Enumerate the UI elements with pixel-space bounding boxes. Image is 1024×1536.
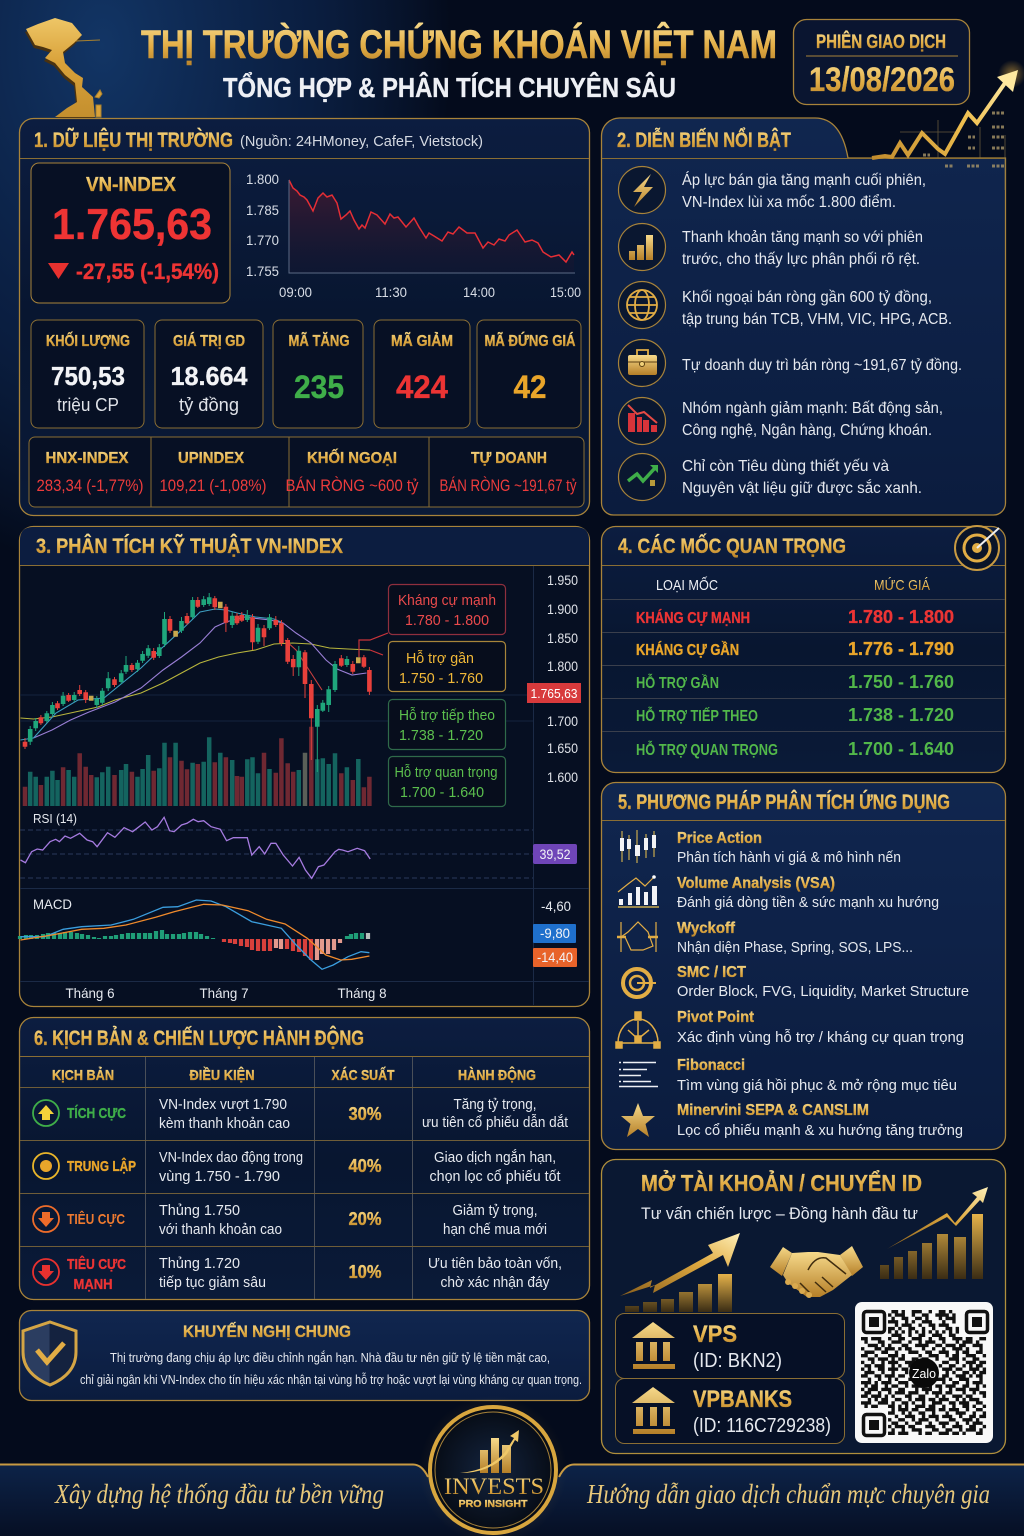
icon: volume [618, 875, 659, 907]
row: neutral: Giao dịch ngắn hạn, [434, 1149, 556, 1166]
index strip: UPINDEX [178, 450, 244, 467]
row: strong resistance: KHÁNG CỰ MẠNH [636, 608, 750, 627]
table head [52, 1066, 536, 1084]
price axis: 1.650 [547, 741, 578, 756]
row: near support: HỖ TRỢ GẦN [636, 673, 719, 692]
stat: declining: MÃ GIẢM [391, 330, 453, 350]
intraday line chart [246, 172, 581, 300]
MACD value tag: blue [533, 924, 576, 943]
method: SMC: SMC / ICT [677, 964, 746, 981]
recommendation text: Thị trường đang chịu áp lực điều chỉnh ngắn hạn. Nhà đầu tư nên giữ tỷ lệ tiền mặt cao, [110, 1350, 550, 1365]
heading: MỞ TÀI KHOẢN / CHUYỂN ID [641, 1168, 922, 1196]
text: green sectors: Nguyên vật liệu giữ được sắc xanh. [682, 478, 922, 497]
recommendation text: chỉ giải ngân khi VN-Index cho tín hiệu xác nhận tại vùng hỗ trợ hoặc vượt lại vùng kháng cự quan trọng. [80, 1372, 582, 1387]
stat: advancing: 235 [294, 369, 344, 405]
icon: briefcase [618, 340, 666, 386]
text: falling sectors: Công nghệ, Ngân hàng, Chứng khoán. [682, 422, 932, 439]
price axis [547, 573, 578, 785]
row: positive: TÍCH CỰC [67, 1105, 126, 1122]
text: selling pressure [682, 170, 926, 211]
method: Wyckoff: Nhận diện Phase, Spring, SOS, LPS... [677, 940, 913, 956]
table head: ĐIỀU KIỆN [190, 1066, 254, 1084]
panel 1: market data [20, 118, 590, 516]
panel 4: key levels [602, 526, 1006, 772]
stat: volume: 750,53 [51, 361, 125, 391]
date badge [794, 20, 970, 104]
time axis: Tháng 6 [66, 985, 115, 1001]
row: near resistance: KHÁNG CỰ GẦN [636, 640, 739, 659]
method: Wyckoff [677, 920, 913, 956]
row: key support: 1.700 - 1.640 [848, 739, 954, 759]
row: key support: HỖ TRỢ QUAN TRỌNG [636, 740, 778, 759]
panel 6: scenarios [20, 1018, 590, 1300]
stat: volume: triệu CP [57, 395, 119, 415]
stat: advancing: MÃ TĂNG [288, 330, 350, 350]
volume bars [25, 727, 369, 806]
row: next support: HỖ TRỢ TIẾP THEO [636, 706, 758, 725]
logo wordmark: INVESTS [444, 1474, 544, 1499]
intraday line chart: 09:00 [279, 284, 312, 300]
row: positive [33, 1096, 569, 1132]
broker card: VPBanks [616, 1378, 844, 1444]
method: VSA [677, 875, 939, 911]
method: SMC [677, 964, 969, 1000]
candle bodies [30, 597, 347, 742]
row: neutral: 40% [348, 1156, 382, 1176]
subtitle: TỔNG HỢP & PHÂN TÍCH CHUYÊN SÂU [223, 72, 676, 103]
heading: KHUYẾN NGHỊ CHUNG [183, 1322, 351, 1341]
intraday line chart: 14:00 [463, 284, 495, 300]
row: positive: VN-Index vượt 1.790 [159, 1096, 287, 1113]
price axis: 1.800 [547, 659, 578, 674]
MACD value tag: orange: -14,40 [537, 949, 573, 965]
icon: Fibonacci lines [619, 1062, 658, 1086]
index strip: 109,21 (-1,08%) [160, 476, 266, 495]
icon: star [621, 1103, 655, 1137]
logo badge [419, 1396, 567, 1536]
method: SMC: Order Block, FVG, Liquidity, Market Structure [677, 984, 969, 1000]
heading: 2. DIỄN BIẾN NỔI BẬT [617, 128, 791, 152]
row: negative: hạn chế mua mới [443, 1221, 547, 1238]
method: Minervini: Minervini SEPA & CANSLIM [677, 1102, 869, 1119]
broker card: VPBanks: (ID: 116C729238) [693, 1415, 831, 1437]
method: VSA: Đánh giá dòng tiền & sức mạnh xu hướng [677, 895, 939, 911]
heading: 6. KỊCH BẢN & CHIẾN LƯỢC HÀNH ĐỘNG [34, 1026, 364, 1050]
index strip [29, 437, 584, 507]
time axis [66, 985, 387, 1001]
callout: next support: Hỗ trợ tiếp theo [399, 707, 495, 724]
heading: 3. PHÂN TÍCH KỸ THUẬT VN-INDEX [36, 534, 343, 558]
current price tag: 1.765,63 [530, 686, 578, 701]
intraday line chart: 1.755 [246, 264, 279, 279]
price axis: 1.900 [547, 602, 578, 617]
panel 3: technical analysis [20, 526, 590, 1006]
text: liquidity [682, 229, 923, 268]
intraday line chart: 11:30 [375, 284, 407, 300]
icon: Wyckoff [617, 922, 658, 952]
footer band [0, 1464, 1024, 1536]
callout: near support: Hỗ trợ gần [406, 650, 474, 667]
method: VSA: Volume Analysis (VSA) [677, 875, 835, 892]
row: neutral: TRUNG LẬP [67, 1157, 136, 1175]
method: Pivot Point [677, 1009, 964, 1046]
row: positive: kèm thanh khoản cao [159, 1115, 290, 1132]
icon: growth left [620, 1233, 740, 1312]
icon: target SMC [623, 969, 656, 997]
subheading: Tư vấn chiến lược – Đồng hành đầu tư [641, 1204, 918, 1223]
map of Vietnam [25, 18, 102, 120]
text: liquidity: trước, cho thấy lực phân phối rõ rệt. [682, 251, 920, 268]
method: Minervini: Lọc cổ phiếu mạnh & xu hướng tăng trưởng [677, 1123, 963, 1139]
text: proprietary trading: Tự doanh duy trì bán ròng ~191,67 tỷ đồng. [682, 357, 962, 374]
VN-Index card [31, 163, 230, 303]
stat: advancing [273, 320, 363, 428]
date badge: 13/08/2026 [809, 61, 955, 99]
candlestick chart [20, 593, 388, 806]
index strip: TỰ DOANH [471, 450, 547, 467]
index strip: BÁN RÒNG ~191,67 tỷ [440, 476, 577, 495]
logo bars and arrow [460, 1430, 519, 1473]
table head [656, 576, 930, 594]
icon: falling bars [618, 398, 666, 444]
row: positive: 30% [348, 1104, 382, 1124]
icon: candlesticks [620, 830, 656, 863]
row: negative: TIÊU CỰC [67, 1210, 125, 1228]
table head: XÁC SUẤT [332, 1067, 394, 1084]
row: negative: Giảm tỷ trọng, [452, 1202, 538, 1219]
panel: open account [602, 1160, 1006, 1454]
method: Fibonacci: Tìm vùng giá hồi phục & mở rộng mục tiêu [677, 1078, 957, 1094]
recommendation text [80, 1350, 582, 1387]
time axis: Tháng 7 [200, 985, 249, 1001]
row: very negative: Ưu tiên bảo toàn vốn, [428, 1255, 562, 1272]
row: very negative: chờ xác nhận đáy [440, 1274, 550, 1291]
row: strong resistance [636, 607, 954, 627]
RSI chart [20, 811, 589, 888]
panel 2: highlights [602, 118, 1006, 515]
row: neutral [33, 1149, 561, 1185]
source note: (Nguồn: 24HMoney, CafeF, Vietstock) [240, 133, 483, 150]
text: foreign selling: Khối ngoại bán ròng gần 600 tỷ đồng, [682, 289, 932, 306]
heading: 4. CÁC MỐC QUAN TRỌNG [618, 534, 846, 558]
text: liquidity: Thanh khoản tăng mạnh so với phiên [682, 229, 923, 246]
price axis: 1.850 [547, 631, 578, 646]
intraday line chart: 1.785 [246, 203, 279, 218]
broker card: VPBanks: VPBANKS [693, 1386, 792, 1413]
callout: near support [388, 642, 506, 692]
VN-Index card: VN-INDEX [86, 174, 177, 196]
index strip: 283,34 (-1,77%) [36, 476, 144, 495]
stat: unchanged: MÃ ĐỨNG GIÁ [484, 330, 576, 350]
row: very negative: Thủng 1.720 [159, 1255, 240, 1272]
method: Fibonacci: Fibonacci [677, 1057, 745, 1074]
method: Wyckoff: Wyckoff [677, 920, 736, 937]
broker card: VPS [616, 1314, 844, 1378]
RSI chart: RSI (14) [33, 811, 77, 826]
method: Pivot Point: Xác định vùng hỗ trợ / kháng cự quan trọng [677, 1029, 964, 1046]
index strip: KHỐI NGOẠI [307, 447, 397, 467]
icon: lightning [618, 166, 666, 214]
stat: value: 18.664 [170, 361, 248, 391]
row: near resistance [636, 639, 954, 659]
callout: key support: Hỗ trợ quan trọng [394, 764, 498, 781]
row: near resistance: 1.776 - 1.790 [848, 639, 954, 659]
method: Price Action [677, 830, 901, 866]
icon: growth right [880, 1187, 988, 1279]
stat: unchanged [477, 320, 581, 428]
row: positive: Tăng tỷ trọng, [454, 1096, 536, 1113]
stat: declining [374, 320, 470, 428]
index strip: HNX-INDEX [46, 450, 129, 467]
row: neutral: VN-Index dao động trong [159, 1149, 303, 1166]
arrow: gold rising chart [872, 60, 1024, 190]
intraday line chart: 15:00 [550, 284, 581, 300]
panel: general recommendation [20, 1310, 590, 1400]
price axis: 1.600 [547, 770, 578, 785]
index strip: BÁN RÒNG ~600 tỷ [286, 476, 419, 495]
stat: volume: KHỐI LƯỢNG [46, 330, 130, 350]
row: very negative: tiếp tục giảm sâu [159, 1274, 266, 1291]
table head: KỊCH BẢN [52, 1067, 114, 1084]
icon: liquidity bars [618, 224, 666, 270]
panel 5: methods [602, 782, 1006, 1150]
time axis: Tháng 8 [338, 985, 387, 1001]
price axis: 1.700 [547, 714, 578, 729]
broker card: VPS: (ID: BKN2) [693, 1350, 782, 1372]
callout: strong resistance: Kháng cự mạnh [398, 592, 496, 609]
method: Fibonacci [677, 1057, 957, 1094]
MACD value tag: blue: -9,80 [540, 925, 570, 941]
stat: unchanged: 42 [514, 369, 546, 405]
method: Price Action: Price Action [677, 830, 762, 847]
row: key support [636, 739, 954, 759]
stat: declining: 424 [396, 369, 448, 405]
text: foreign selling: tập trung bán TCB, VHM, VIC, HPG, ACB. [682, 311, 952, 328]
QR code [855, 1302, 993, 1443]
date badge: PHIÊN GIAO DỊCH [816, 31, 946, 53]
heading: 1. DỮ LIỆU THỊ TRƯỜNG [34, 128, 233, 152]
table head: LOẠI MỐC [656, 576, 718, 594]
tagline left: Xây dựng hệ thống đầu tư bền vững [54, 1479, 384, 1509]
stat: volume [31, 320, 144, 428]
candle wicks [30, 593, 347, 772]
table head: MỨC GIÁ [874, 577, 930, 594]
row: near support: 1.750 - 1.760 [848, 672, 954, 692]
title: THỊ TRƯỜNG CHỨNG KHOÁN VIỆT NAM [141, 21, 777, 67]
row: negative: với thanh khoản cao [159, 1221, 282, 1238]
icon: pivot [616, 1012, 660, 1048]
row: very negative [33, 1255, 562, 1293]
row: next support [636, 705, 954, 725]
text: selling pressure: Áp lực bán gia tăng mạnh cuối phiên, [682, 170, 926, 189]
method: Minervini [677, 1102, 963, 1139]
row: near support [636, 672, 954, 692]
logo tagline: PRO INSIGHT [458, 1499, 528, 1510]
intraday line chart: 1.770 [246, 233, 279, 248]
icon: shield [23, 1322, 76, 1385]
broker card: VPS: VPS [693, 1321, 737, 1348]
RSI value tag [533, 844, 577, 864]
callout: key support: 1.700 - 1.640 [400, 784, 484, 801]
row: next support: 1.738 - 1.720 [848, 705, 954, 725]
MACD chart [20, 896, 577, 969]
VN-Index card: -27,55 (-1,54%) [76, 259, 219, 284]
text: falling sectors [682, 400, 943, 439]
stat: value: GIÁ TRỊ GD [173, 331, 245, 350]
resistance connector [359, 633, 388, 657]
Zalo badge [909, 1358, 939, 1388]
row: very negative: 10% [348, 1262, 382, 1282]
MACD chart: -4,60 [541, 898, 571, 914]
callout: strong resistance: 1.780 - 1.800 [405, 612, 489, 629]
text: green sectors: Chỉ còn Tiêu dùng thiết yếu và [682, 458, 889, 475]
text: green sectors [682, 458, 922, 497]
MACD chart: MACD [33, 896, 72, 912]
text: selling pressure: VN-Index lùi xa mốc 1.800 điểm. [682, 193, 896, 211]
intraday line chart: 1.800 [246, 172, 279, 187]
RSI value tag: 39,52 [540, 846, 571, 862]
icon: target [955, 526, 999, 570]
icon: globe [618, 282, 666, 328]
row: negative: 20% [348, 1209, 382, 1229]
row: very negative: TIÊU CỰC [67, 1255, 126, 1273]
row: very negative: MẠNH [74, 1276, 112, 1293]
row: neutral: vùng 1.750 - 1.790 [159, 1168, 280, 1185]
Zalo badge: Zalo [912, 1366, 936, 1381]
stat: value [155, 320, 263, 428]
row: strong resistance: 1.780 - 1.800 [848, 607, 954, 627]
VN-Index card: 1.765,63 [52, 200, 212, 249]
callout: next support: 1.738 - 1.720 [399, 727, 483, 744]
row: negative: Thủng 1.750 [159, 1202, 240, 1219]
row: positive: ưu tiên cổ phiếu dẫn dắt [422, 1114, 569, 1131]
callout: strong resistance [388, 584, 506, 634]
stat: value: tỷ đồng [179, 395, 239, 415]
method: Pivot Point: Pivot Point [677, 1009, 755, 1026]
row: negative [33, 1202, 547, 1238]
method: Price Action: Phân tích hành vi giá & mô hình nến [677, 850, 901, 866]
text: foreign selling [682, 289, 952, 328]
moving averages [20, 609, 370, 740]
icon: green trend [618, 454, 666, 500]
callout: near support: 1.750 - 1.760 [399, 670, 483, 687]
price axis: 1.950 [547, 573, 578, 588]
row: neutral: chọn lọc cổ phiếu tốt [430, 1168, 561, 1185]
title [141, 21, 777, 103]
callout: key support [388, 756, 506, 806]
table head: HÀNH ĐỘNG [458, 1066, 536, 1084]
icon: handshake [770, 1246, 863, 1298]
callout: next support [388, 700, 506, 750]
text: falling sectors: Nhóm ngành giảm mạnh: Bất động sản, [682, 400, 943, 417]
